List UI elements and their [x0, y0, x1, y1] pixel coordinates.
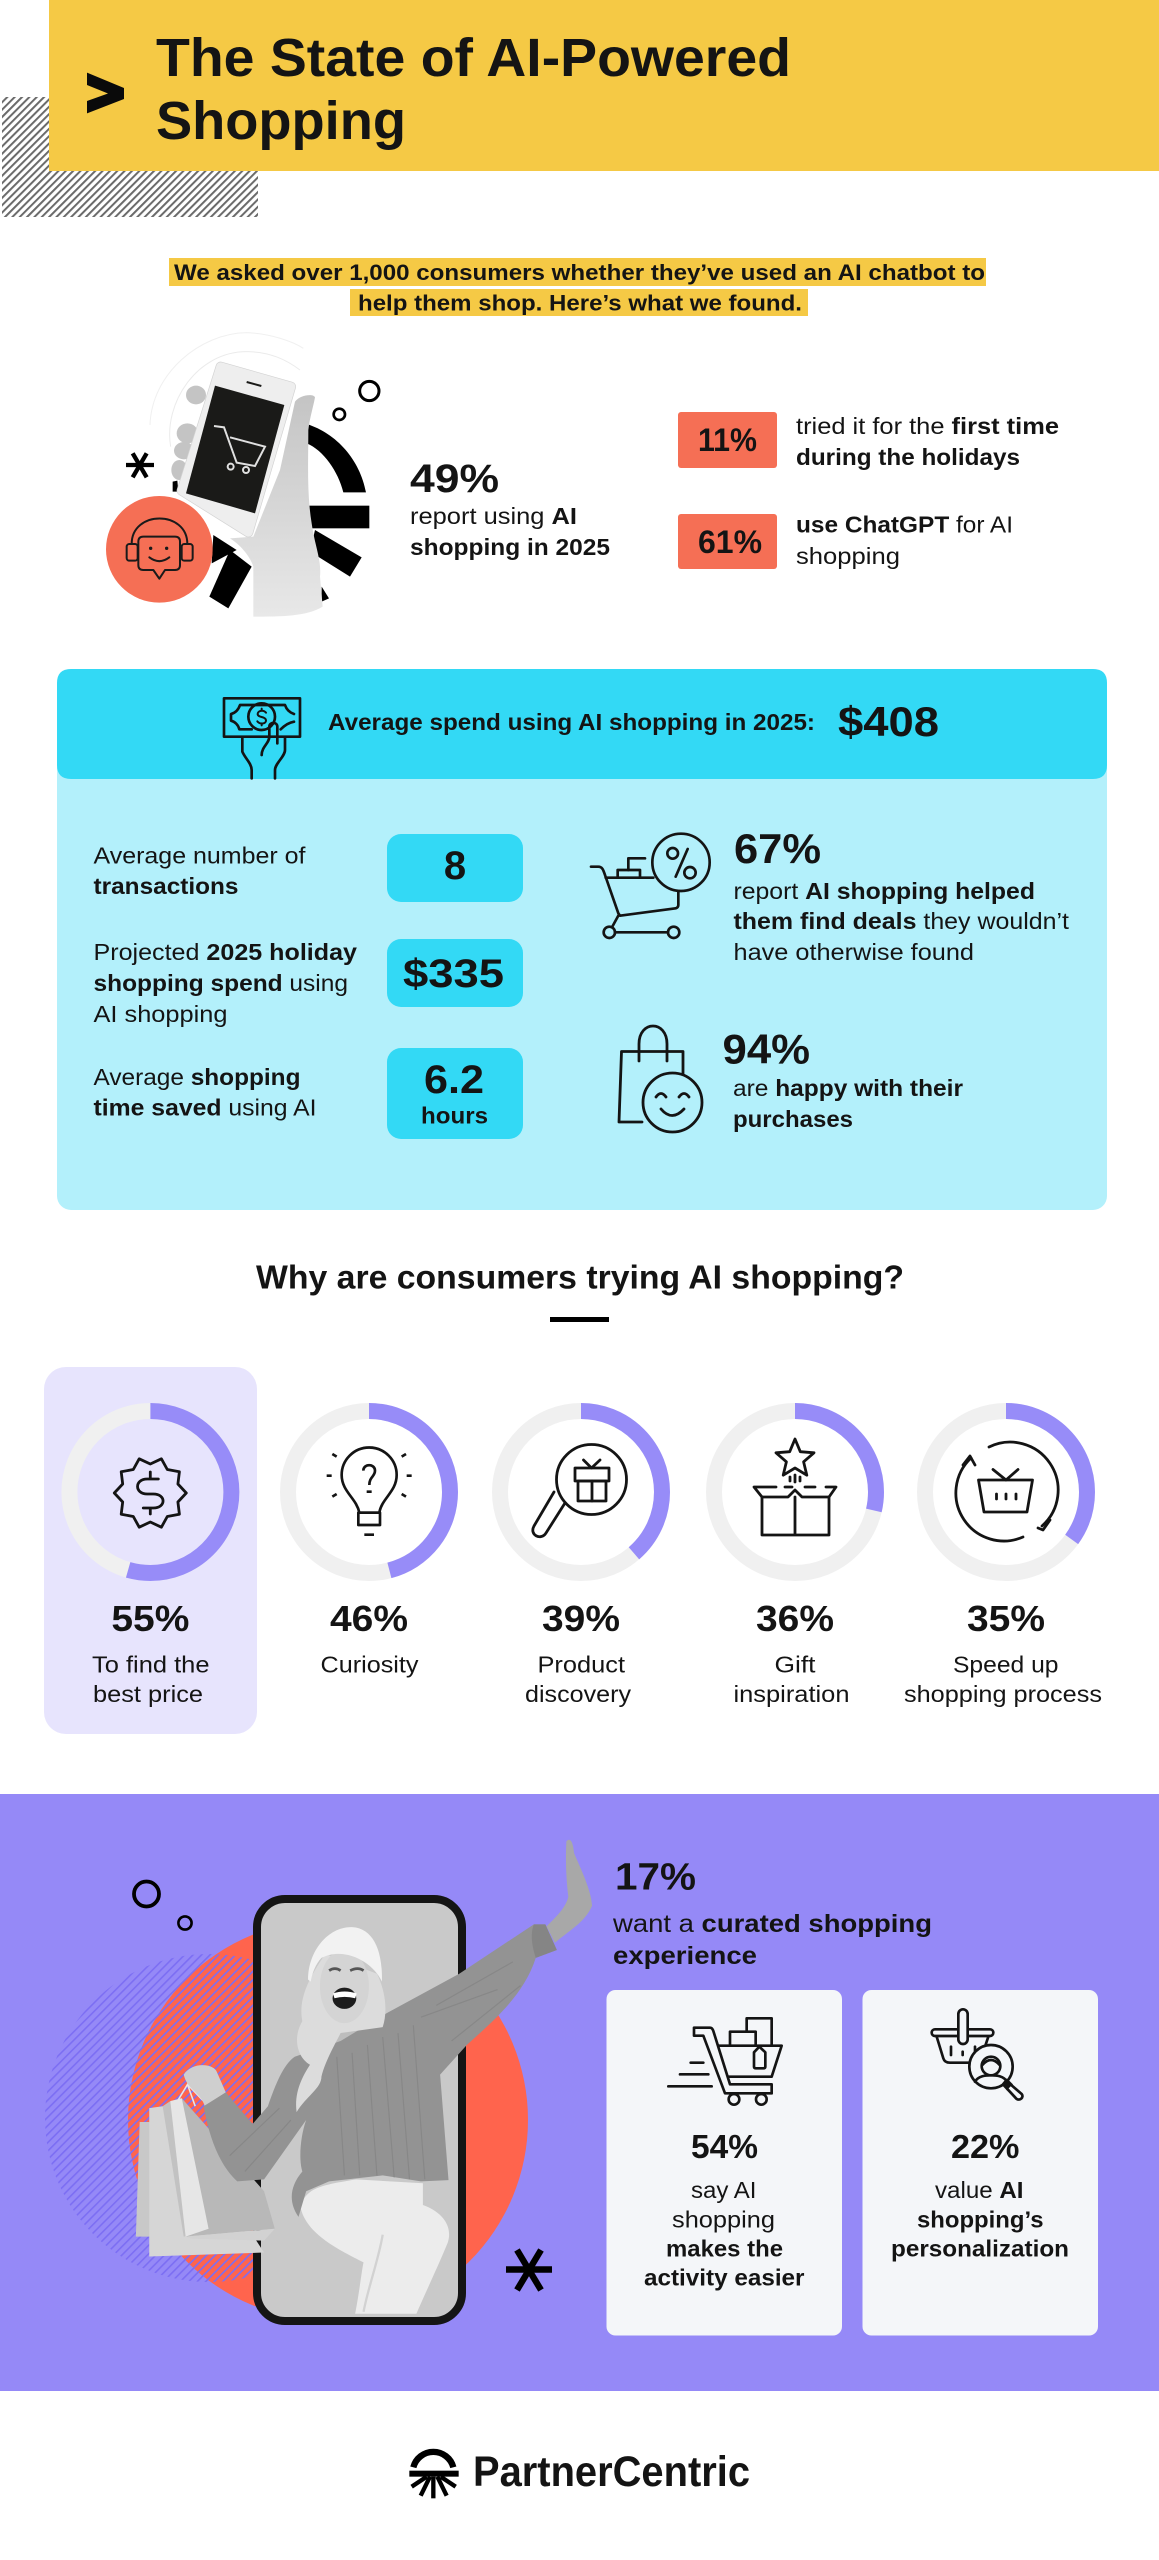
panel: highlight behind first reason — [44, 1367, 257, 1734]
reason: product discovery: discovery — [525, 1681, 632, 1707]
stat: 11% first time: tried it for the first time — [796, 413, 1059, 439]
reason: gift inspiration — [714, 1411, 876, 1707]
cart on screen — [214, 426, 265, 473]
reason: best price: best price — [93, 1681, 203, 1707]
stat row: transactions: 8 — [444, 844, 466, 888]
title: Shopping — [156, 91, 406, 151]
heading: why: Why are consumers trying AI shopping? — [256, 1258, 904, 1296]
card: personalization: personalization — [891, 2236, 1069, 2262]
stat: 11% first time — [678, 412, 1059, 470]
stat: 67%: have otherwise found — [734, 939, 974, 965]
title: The State of AI-Powered — [156, 28, 791, 88]
icon: basket with magnifier — [932, 2009, 1022, 2100]
card: makes activity easier: shopping — [672, 2206, 775, 2232]
asterisk — [126, 453, 154, 477]
stat row: time saved — [94, 1048, 523, 1139]
stat: 49% report using AI: 49% — [410, 457, 499, 501]
phone — [182, 367, 291, 532]
stat row: transactions — [94, 834, 523, 902]
reason: gift inspiration: inspiration — [734, 1681, 850, 1707]
icon: logo mark — [409, 2452, 459, 2498]
reason: best price — [69, 1411, 231, 1707]
rings — [360, 381, 379, 401]
panel header — [57, 669, 1107, 779]
reason: gift inspiration: Gift — [774, 1652, 816, 1678]
hat — [308, 1927, 382, 1982]
stat: 94%: purchases — [733, 1106, 853, 1132]
stat row: time saved: Average shopping — [94, 1064, 300, 1090]
stat: 67%: report AI shopping helped — [734, 878, 1035, 904]
stat row: projected spend: Projected 2025 holiday — [94, 939, 357, 965]
card: makes activity easier: activity easier — [644, 2264, 805, 2290]
stat row: time saved: hours — [421, 1102, 488, 1128]
donut chart 55% — [69, 1411, 231, 1573]
donut chart 39% — [500, 1411, 662, 1573]
reason: speed up: Speed up — [953, 1652, 1058, 1678]
stat: 11% first time: 11% — [698, 422, 757, 458]
stat row: time saved: time saved using AI — [94, 1094, 316, 1120]
stat row: transactions: Average number of — [94, 842, 306, 868]
donut chart 36% — [714, 1411, 876, 1573]
stat row: projected spend: $335 — [403, 952, 504, 996]
stat: 94%: are happy with their — [733, 1075, 963, 1101]
icon: hand with banknote — [224, 698, 300, 778]
sunburst — [173, 424, 369, 608]
icon: chatbot headset — [106, 496, 213, 603]
donut chart 35% — [925, 1411, 1087, 1573]
panel header: Average spend using AI shopping in 2025: — [328, 709, 815, 735]
card: makes activity easier: 54% — [691, 2128, 758, 2165]
icon: cart with percent — [591, 834, 710, 938]
card: makes activity easier: say AI — [691, 2177, 756, 2203]
raised hand — [546, 1840, 592, 1943]
icon: magnifier gift — [533, 1444, 626, 1537]
icon: lightbulb question — [327, 1447, 412, 1535]
reason: best price: To find the — [92, 1652, 210, 1678]
phone — [257, 1899, 462, 2321]
icon: speeding cart — [668, 2018, 782, 2105]
stat: 67%: them find deals they wouldn’t — [734, 908, 1070, 934]
reason: speed up: 35% — [967, 1598, 1045, 1639]
panel header: $408 — [838, 698, 939, 745]
hair — [296, 1954, 385, 2112]
stat: 61% use ChatGPT — [678, 512, 1013, 569]
stat row: time saved: 6.2 — [424, 1058, 484, 1102]
title banner — [49, 0, 1159, 171]
illustration: hand holding phone with shopping cart — [106, 333, 379, 617]
reason: speed up: shopping process — [904, 1681, 1102, 1707]
hand — [230, 395, 323, 617]
stat row: transactions: transactions — [94, 873, 238, 899]
stat row: projected spend: AI shopping — [94, 1001, 228, 1027]
stat: 61% use ChatGPT: use ChatGPT for AI — [796, 512, 1013, 538]
stat row: projected spend — [94, 939, 523, 1027]
intro highlighted text: We asked over 1,000 consumers whether they’ve used an AI chatbot to — [174, 260, 985, 285]
stat: 94%: 94% — [722, 1026, 810, 1072]
reason: best price: 55% — [111, 1598, 189, 1639]
fingers — [171, 386, 206, 480]
stat: 49% report using AI: shopping in 2025 — [410, 534, 610, 560]
icon: basket with cycle arrows — [956, 1442, 1058, 1541]
stat row: projected spend: shopping spend using — [94, 970, 348, 996]
pants — [300, 2179, 449, 2314]
icon: dollar badge — [114, 1459, 186, 1527]
decorative hatch block — [2, 97, 258, 217]
stat: 11% first time: during the holidays — [796, 444, 1020, 470]
icon: smiling shopping bag — [619, 1026, 702, 1132]
reason: curiosity: 46% — [330, 1598, 408, 1639]
stat: 67% — [734, 825, 1070, 965]
woman — [136, 1840, 592, 2314]
title — [156, 28, 791, 151]
panel: curated shopping — [0, 1794, 1159, 2391]
stat: 49% report using AI — [410, 457, 610, 560]
donut chart 46% — [288, 1411, 450, 1573]
illustration: woman with shopping bags leaping from phone — [30, 1840, 592, 2321]
face — [320, 1950, 369, 2023]
stat: 17% curated experience: want a curated shopping — [612, 1910, 932, 1938]
reason: curiosity — [288, 1411, 450, 1678]
neck — [329, 2013, 383, 2045]
stat: 61% use ChatGPT: 61% — [698, 524, 762, 560]
stat: 94% — [722, 1026, 963, 1132]
panel: average spend — [57, 669, 1107, 1210]
stat: 49% report using AI: report using AI — [410, 503, 577, 529]
icon: gift box with star — [754, 1439, 836, 1535]
asterisk — [506, 2250, 552, 2290]
reason: product discovery: 39% — [542, 1598, 620, 1639]
stat: 17% curated experience: 17% — [615, 1856, 696, 1898]
card: makes activity easier — [606, 1990, 842, 2336]
bags — [136, 2122, 150, 2237]
reason: gift inspiration: 36% — [756, 1598, 834, 1639]
card: personalization: value AI — [935, 2177, 1024, 2203]
rings — [134, 1882, 159, 1906]
card: personalization: 22% — [951, 2128, 1020, 2165]
hand holding bags — [184, 2065, 226, 2106]
intro highlighted text: help them shop. Here’s what we found. — [358, 290, 802, 316]
heading: why — [256, 1258, 904, 1322]
card: makes activity easier: makes the — [666, 2236, 783, 2262]
reason: speed up — [904, 1411, 1102, 1707]
card: personalization: shopping’s — [917, 2206, 1044, 2232]
stat: 17% curated experience: experience — [613, 1942, 757, 1970]
reason: product discovery — [500, 1411, 662, 1707]
intro highlighted text — [169, 258, 986, 316]
reason: curiosity: Curiosity — [320, 1652, 419, 1678]
card: personalization — [862, 1990, 1098, 2336]
stat: 17% curated experience — [612, 1856, 932, 1970]
stat: 67%: 67% — [734, 825, 821, 872]
sweater — [204, 1924, 557, 2217]
stat: 61% use ChatGPT: shopping — [796, 543, 900, 569]
logo: PartnerCentric: PartnerCentric — [473, 2448, 750, 2496]
reason: product discovery: Product — [538, 1652, 626, 1678]
icon: chevron — [87, 73, 124, 113]
